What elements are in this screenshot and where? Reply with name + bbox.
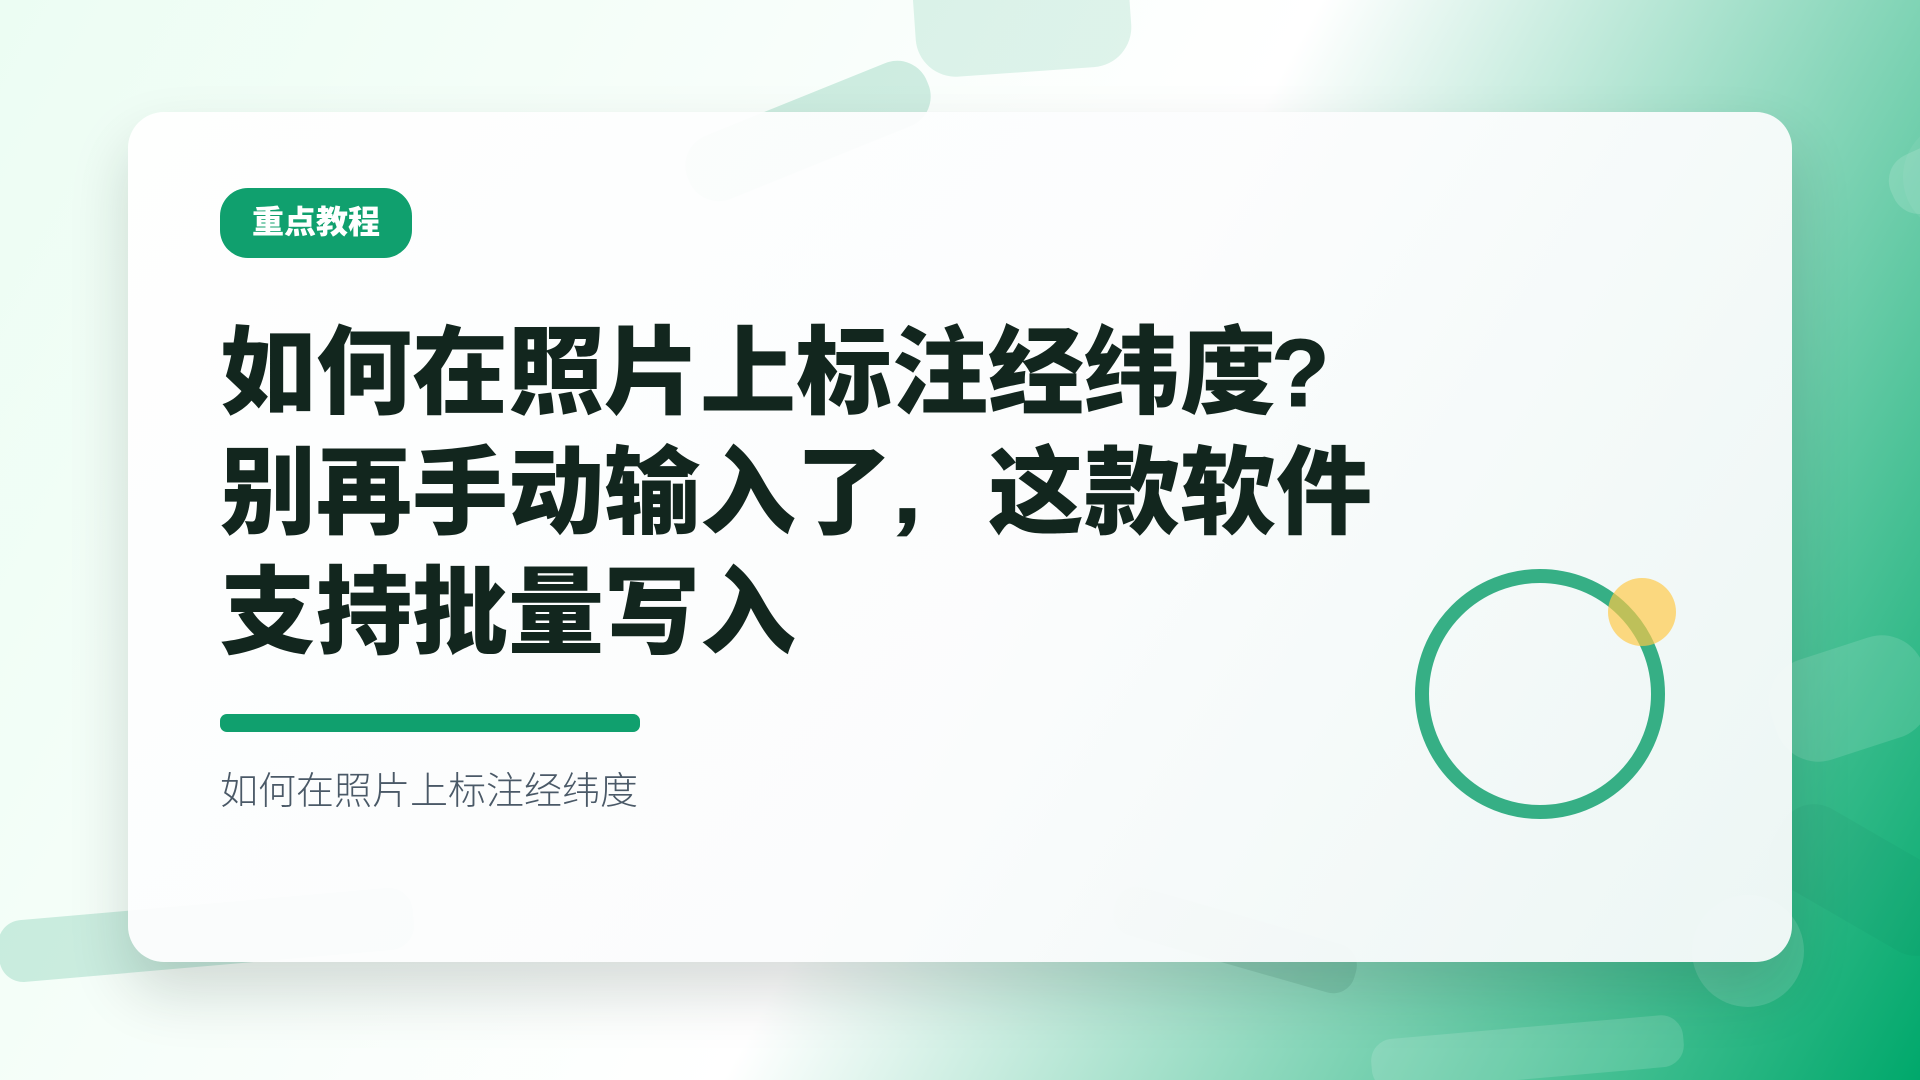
shape: bottom-left block [0,886,416,984]
title [220,320,1372,667]
shape: right middle block [1758,624,1920,773]
badge: key tutorial: 重点教程 [252,204,380,240]
panel: main card [128,112,1792,962]
shape: top pale block [910,0,1134,79]
shape: circle lower right [1692,895,1804,1007]
subtitle: 如何在照片上标注经纬度 [220,771,638,813]
shape: right top circle [1903,120,1920,234]
shape: right top block [1880,125,1920,223]
shape: bottom light block [1369,1013,1686,1080]
title: 支持批量写入 [220,560,796,667]
icon: green ring [1415,569,1665,819]
shape: bottom dark block [1108,882,1362,998]
shape: top diagonal block [676,51,940,211]
icon: yellow dot [1608,578,1676,646]
title: 别再手动输入了，这款软件 [220,440,1372,547]
accent bar [220,714,640,732]
shape: right lower dark block [1756,791,1920,969]
title: 如何在照片上标注经纬度? [220,320,1330,427]
badge: key tutorial [220,188,412,258]
